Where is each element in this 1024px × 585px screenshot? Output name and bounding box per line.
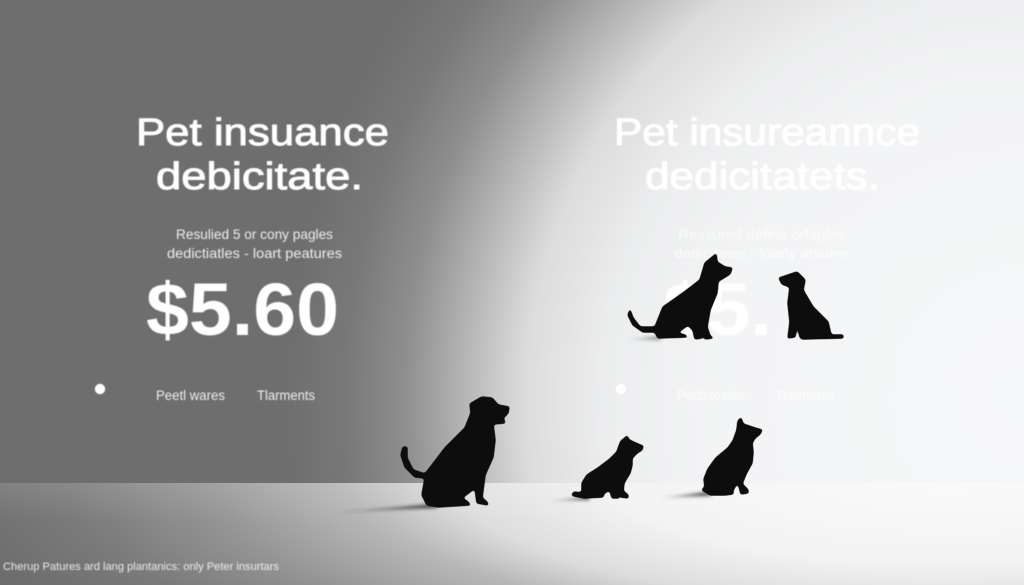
icon: left bullet dot [95,384,105,394]
icon: large sitting dog with shadow [327,397,509,513]
text block: right description: dedicitates - loarly atsures [674,245,850,261]
icon: medium sitting dog with shadow [657,418,762,498]
label: left feature 1: Peetl wares [156,388,225,403]
text block: left description: dedictiatles - loart peatures [167,245,342,261]
price: right: $5. [663,268,772,351]
heading: right title [614,112,920,198]
text block: left description: Resulied 5 or cony pagles [176,226,333,242]
icon: upper right-facing dog with shadow [625,254,732,340]
floor surface [0,483,1024,585]
footer caption: Cherup Patures ard lang plantanics: only Peter insurtars [3,561,279,573]
label: right feature 1: Pedtixoales [677,388,745,403]
label: right feature 2: Tlarments [775,388,835,403]
panel: left pricing text [95,112,389,403]
text block: right description: Ressured define orfagles [678,226,845,242]
text block: right description [674,226,850,261]
text block: left description [167,226,342,261]
label: left feature 2: Tlarments [257,388,315,403]
heading: right title: dedicitatets. [645,156,880,198]
icon: right bullet dot [616,384,626,394]
heading: left title: Pet insuance [136,112,389,154]
heading: right title: Pet insureannce [614,112,920,154]
price: left: $5.60 [146,268,339,351]
icon: upper left-facing dog [779,272,843,339]
panel: right faded pricing text [614,112,920,403]
icon: small sitting dog with shadow [546,436,643,501]
heading: left title [136,112,389,198]
heading: left title: debicitate. [156,156,363,198]
